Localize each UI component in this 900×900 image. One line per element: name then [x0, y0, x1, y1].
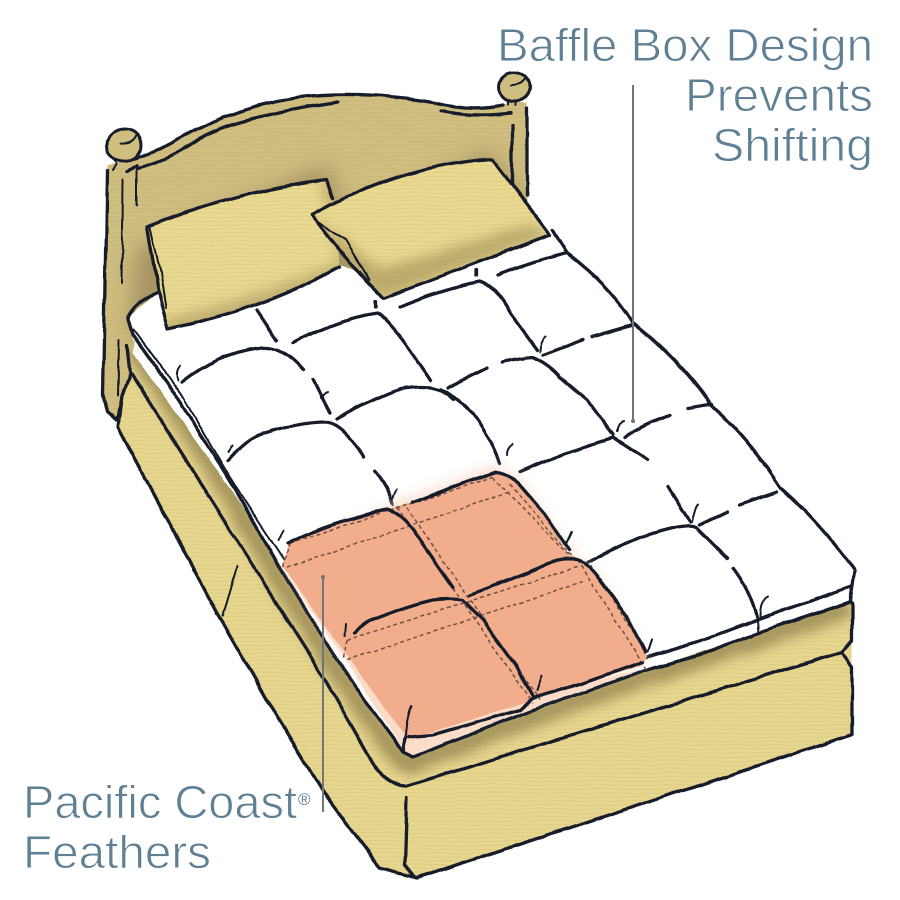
- pillow: left: [145, 178, 342, 331]
- pillows: [147, 159, 550, 345]
- label: Pacific Coast Feathers: Feathers: [23, 826, 211, 878]
- quilted baffle seams: [177, 253, 777, 618]
- topper outline: [128, 230, 855, 757]
- label: Baffle Box Design Prevents Shifting: Baffle Box Design: [497, 19, 873, 71]
- label: Baffle Box Design Prevents Shifting: Shifting: [712, 119, 873, 171]
- feather window seams: [279, 472, 651, 752]
- label: Pacific Coast Feathers: ®: [298, 790, 311, 809]
- mattress topper: [128, 230, 855, 757]
- pale strip below feather window: [283, 570, 647, 755]
- leader line: baffle box: [631, 85, 635, 423]
- label: Pacific Coast Feathers: [23, 776, 311, 878]
- pillow: right: [312, 159, 550, 298]
- label: Baffle Box Design Prevents Shifting: [497, 19, 873, 171]
- knob: right post: [498, 72, 530, 102]
- label: Pacific Coast Feathers: Pacific Coast: [23, 776, 297, 828]
- feather stitching: [283, 477, 647, 703]
- label: Baffle Box Design Prevents Shifting: Prevents: [685, 69, 873, 121]
- box spring and skirt: [118, 342, 855, 878]
- skirt outlines: [118, 345, 852, 878]
- bed illustration: [103, 72, 855, 878]
- knob: left post: [107, 129, 141, 170]
- headboard: [103, 72, 530, 420]
- leader line: feathers: [321, 575, 325, 812]
- glow around feather window: [283, 465, 647, 745]
- feather window: peach fill: [283, 472, 647, 740]
